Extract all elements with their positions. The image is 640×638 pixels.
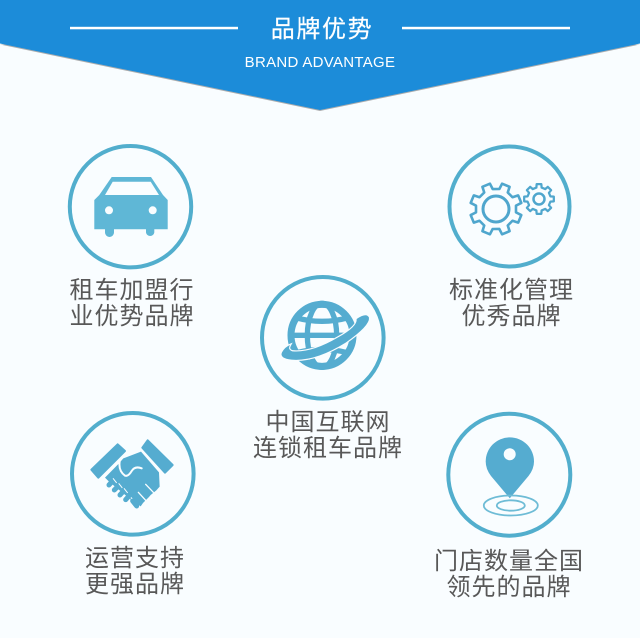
label: globe: 连锁租车品牌 xyxy=(253,435,403,462)
label: handshake xyxy=(85,545,185,598)
label: gears: 优秀品牌 xyxy=(462,303,562,330)
label: gears xyxy=(449,277,574,330)
label: car xyxy=(70,277,194,330)
icon: gears xyxy=(450,146,570,266)
label: map pin xyxy=(434,548,584,601)
title: 品牌优势 xyxy=(271,16,373,43)
label: map pin: 领先的品牌 xyxy=(446,574,572,601)
label: globe: 中国互联网 xyxy=(266,409,390,436)
icon: map pin xyxy=(448,414,570,536)
label: handshake: 运营支持 xyxy=(85,545,185,572)
label: globe xyxy=(253,409,403,462)
icon: globe xyxy=(262,277,384,399)
icon: car xyxy=(70,146,191,267)
icon: handshake xyxy=(72,413,194,535)
label: gears: 标准化管理 xyxy=(449,277,574,304)
label: car: 租车加盟行 xyxy=(70,277,194,304)
header banner xyxy=(0,0,640,111)
label: handshake: 更强品牌 xyxy=(85,571,185,598)
label: map pin: 门店数量全国 xyxy=(434,548,584,575)
label: car: 业优势品牌 xyxy=(70,303,194,330)
subtitle: BRAND ADVANTAGE xyxy=(245,54,395,71)
